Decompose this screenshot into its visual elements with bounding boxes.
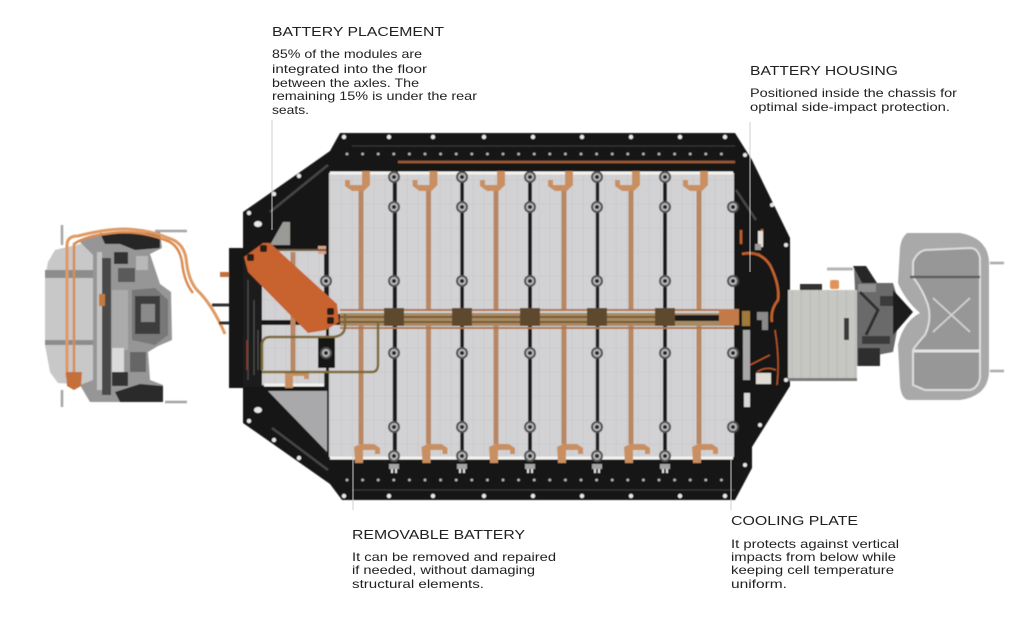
module white edge strips: [264, 173, 733, 458]
right electronics bay: [741, 229, 778, 407]
left frame wiring: [212, 262, 262, 387]
text block: cooling plate: It protects against vertical: [731, 537, 899, 551]
text block: battery housing: BATTERY HOUSING: [750, 63, 898, 78]
text block: removable battery: structural elements.: [352, 577, 484, 591]
text block: removable battery: [352, 527, 556, 591]
frame inner rivets: [270, 146, 756, 490]
orange cooling plate connector: [244, 243, 339, 333]
text block: battery housing: Positioned inside the chassis for: [750, 86, 957, 100]
rear tank cover: [898, 233, 1004, 400]
text block: battery housing: [750, 63, 957, 114]
central bus rail: [340, 308, 739, 328]
olive coolant pipes: [262, 314, 378, 372]
text block: battery placement: BATTERY PLACEMENT: [272, 24, 444, 39]
text block: battery housing: optimal side-impact protection.: [750, 100, 950, 114]
leader line: battery housing: [749, 122, 751, 272]
text block: cooling plate: COOLING PLATE: [731, 513, 858, 528]
leader line: battery placement: [271, 120, 273, 230]
frame fasteners: [247, 135, 788, 498]
separator bolts: [320, 171, 739, 473]
module separators: [326, 172, 665, 458]
rear gearbox: [827, 266, 913, 366]
top copper rail: [398, 161, 735, 163]
text block: battery placement: between the axles. The: [272, 76, 419, 90]
battery frame: [229, 133, 790, 500]
text block: cooling plate: uniform.: [731, 577, 787, 591]
rear inverter module: [788, 280, 857, 381]
text block: cooling plate: impacts from below while: [731, 550, 896, 564]
text block: battery placement: remaining 15% is under the rear: [272, 89, 477, 103]
lower-left floor plate: [268, 391, 327, 452]
text block: cooling plate: keeping cell temperature: [731, 563, 894, 577]
leader line: removable battery: [352, 435, 354, 510]
front drive unit: [45, 225, 225, 407]
battery modules: [262, 173, 734, 457]
text block: battery placement: [272, 24, 477, 117]
center mounting bracket: [318, 338, 335, 368]
text block: battery placement: integrated into the floor: [272, 62, 427, 76]
text block: removable battery: if needed, without damaging: [352, 563, 535, 577]
text block: cooling plate: [731, 513, 899, 591]
orange module busbars: [285, 171, 718, 463]
diagram: battery pack and drive units: [45, 133, 1004, 500]
upper-left black control box: [262, 168, 328, 254]
leader line: cooling plate: [730, 460, 732, 510]
text block: battery placement: seats.: [272, 103, 309, 117]
text block: removable battery: REMOVABLE BATTERY: [352, 527, 525, 542]
text block: battery placement: 85% of the modules are: [272, 47, 422, 61]
text block: removable battery: It can be removed and repaired: [352, 550, 556, 564]
